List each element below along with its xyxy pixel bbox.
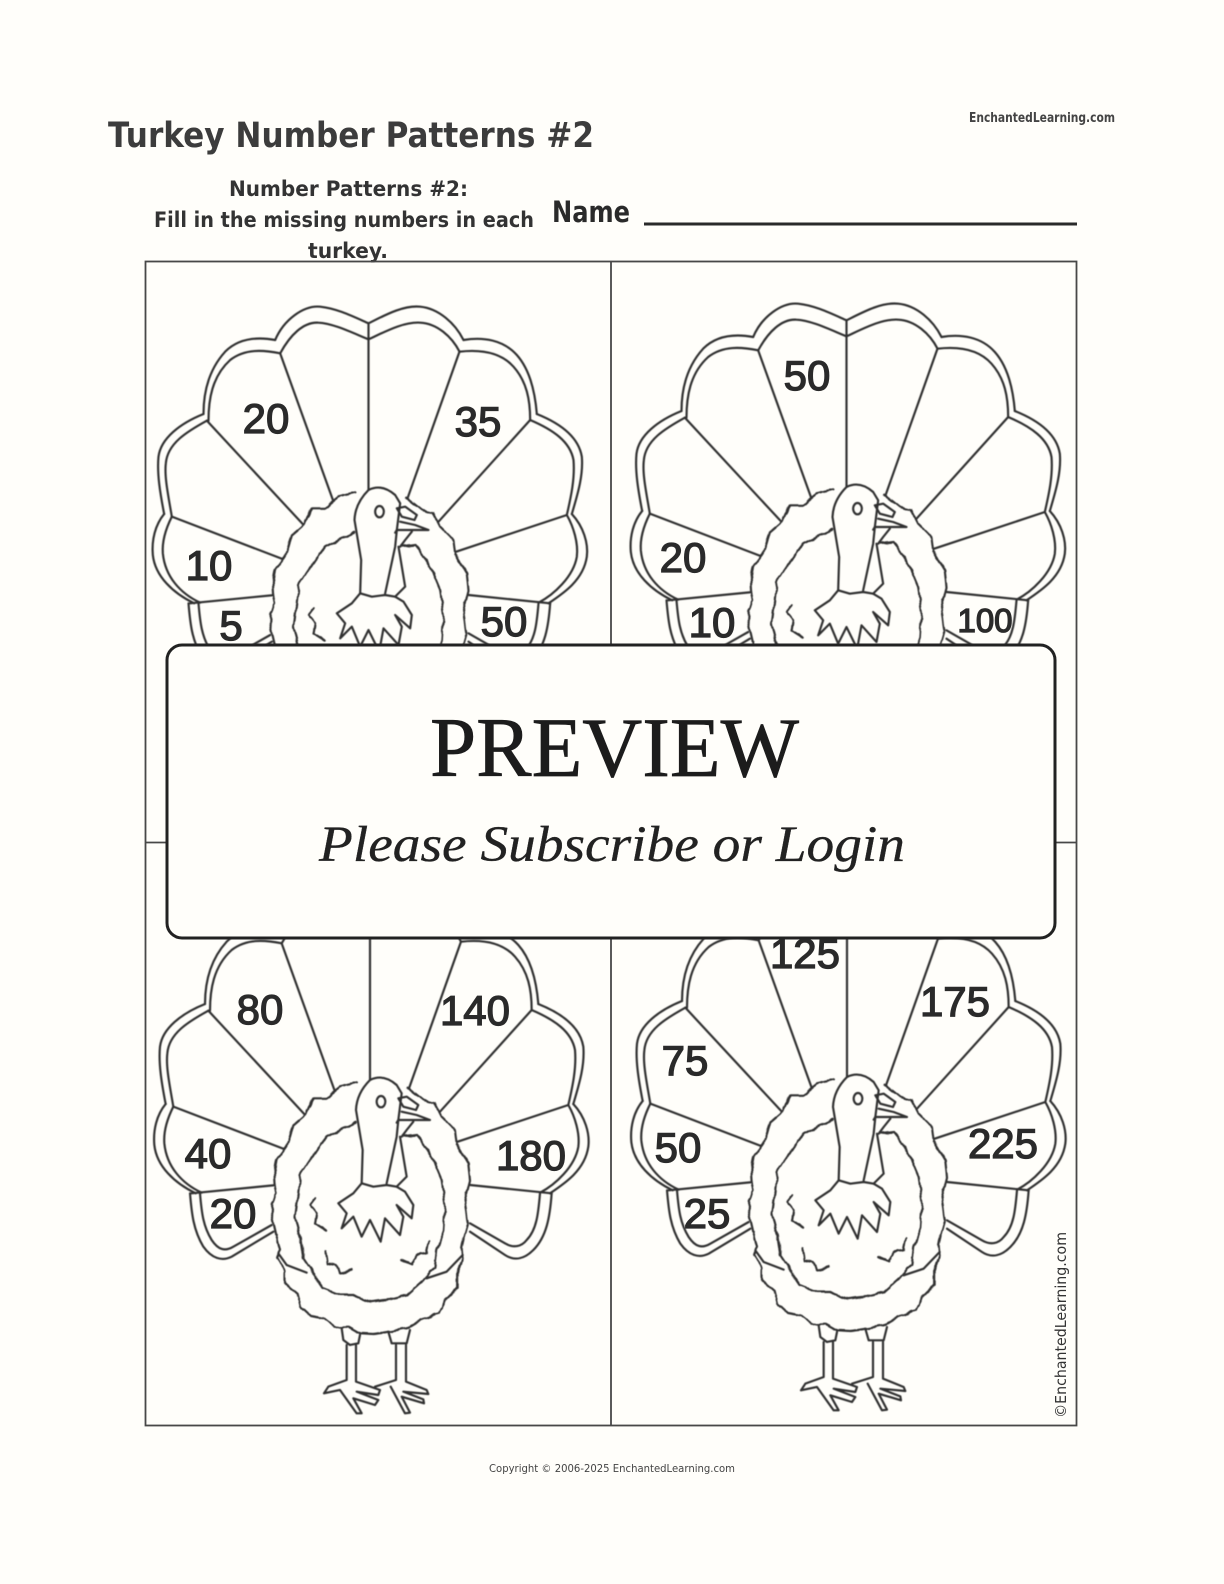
numbers: top right turkey: 10 [689, 599, 735, 646]
worksheet grid [146, 262, 1076, 1426]
numbers: top right turkey [660, 352, 1013, 646]
site name: EnchantedLearning.com [969, 111, 1115, 126]
turkey: top right [631, 303, 1065, 820]
numbers: bottom left turkey: 80 [237, 986, 283, 1033]
title: Turkey Number Patterns #2 [108, 116, 594, 156]
turkey: bottom right [631, 893, 1066, 1410]
numbers: top left turkey: 5 [219, 602, 243, 649]
turkey: top left [153, 306, 587, 823]
turkey: bottom left [154, 896, 589, 1413]
copyright footer: Copyright © 2006-2025 EnchantedLearning.com [489, 1462, 735, 1475]
numbers: top left turkey [186, 395, 527, 649]
numbers: bottom right turkey: 125 [770, 930, 840, 977]
numbers: bottom right turkey: 225 [968, 1120, 1038, 1167]
numbers: top left turkey: 20 [243, 395, 289, 442]
numbers: top right turkey: 20 [660, 534, 706, 581]
name field [552, 195, 1077, 229]
numbers: top right turkey: 50 [784, 352, 830, 399]
numbers: bottom right turkey: 75 [662, 1037, 708, 1084]
instructions: Number Patterns #2: [229, 177, 468, 201]
numbers: top left turkey: 50 [481, 598, 527, 645]
instructions [154, 177, 534, 263]
vertical copyright on worksheet: ©EnchantedLearning.com [1052, 1232, 1070, 1418]
preview subheading: Please Subscribe or Login [318, 817, 905, 873]
numbers: bottom left turkey: 140 [440, 987, 510, 1034]
instructions: turkey. [308, 239, 388, 263]
numbers: bottom left turkey: 180 [496, 1132, 566, 1179]
numbers: bottom left turkey: 20 [210, 1190, 256, 1237]
numbers: bottom right turkey: 25 [684, 1190, 730, 1237]
name field: Name [552, 195, 630, 229]
numbers: top right turkey: 100 [957, 602, 1013, 639]
numbers: bottom right turkey: 175 [920, 978, 990, 1025]
numbers: bottom left turkey: 40 [185, 1130, 231, 1177]
numbers: bottom right turkey [655, 930, 1038, 1237]
numbers: top left turkey: 10 [186, 542, 232, 589]
numbers: bottom right turkey: 50 [655, 1124, 701, 1171]
instructions: Fill in the missing numbers in each [154, 208, 534, 232]
numbers: bottom left turkey [185, 986, 566, 1237]
preview heading: PREVIEW [430, 701, 800, 795]
numbers: top left turkey: 35 [455, 398, 501, 445]
preview overlay [167, 645, 1055, 938]
